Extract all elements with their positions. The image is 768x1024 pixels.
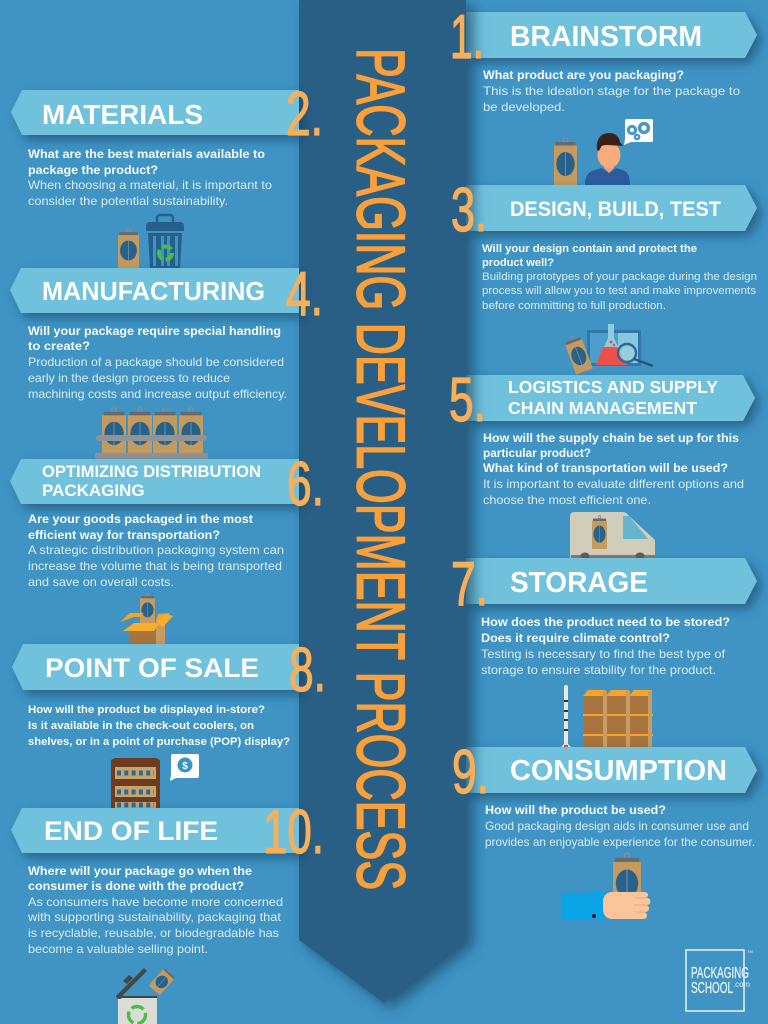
icon: can going into recycling bin bbox=[116, 966, 177, 1024]
icon: store shelf and price bubble bbox=[111, 754, 199, 808]
text block: step 5: choose the most efficient one. bbox=[483, 493, 651, 507]
text block: step 9 bbox=[485, 803, 755, 849]
text block: step 1: What product are you packaging? bbox=[483, 68, 684, 82]
panel: step 2 materials bbox=[11, 80, 323, 268]
number 4: 4. bbox=[286, 260, 323, 329]
text block: step 4: early in the design process to reduce bbox=[28, 371, 230, 385]
text block: step 9: Good packaging design aids in consumer use and bbox=[485, 819, 749, 833]
heading ribbon: brainstorm: BRAINSTORM bbox=[510, 21, 702, 53]
text block: step 1 bbox=[483, 68, 740, 114]
text block: step 5: particular product? bbox=[483, 446, 591, 460]
text block: step 3: before committing to full production. bbox=[482, 300, 666, 312]
text block: step 6: efficient way for transportation? bbox=[28, 528, 220, 542]
panel: step 5 logistics bbox=[466, 375, 755, 560]
heading ribbon: materials bbox=[11, 90, 299, 135]
icon: can in open box bbox=[120, 594, 173, 644]
text block: step 5: How will the supply chain be set up for this bbox=[483, 431, 739, 445]
icon: hand holding can bbox=[562, 853, 650, 920]
heading ribbon: point of sale bbox=[12, 644, 299, 690]
text block: step 3 bbox=[482, 243, 757, 312]
text block: step 4: Production of a package should be considered bbox=[28, 355, 284, 369]
number 10: 10. bbox=[263, 798, 324, 867]
heading ribbon: optimizing distribution packaging: OPTIMIZING DISTRIBUTION bbox=[42, 462, 261, 481]
text block: step 3: Building prototypes of your package during the design bbox=[482, 271, 757, 283]
heading ribbon: consumption: CONSUMPTION bbox=[510, 755, 727, 787]
text block: step 10 bbox=[27, 864, 283, 956]
number 2: 2. bbox=[286, 80, 323, 149]
text block: step 4 bbox=[28, 324, 287, 401]
heading ribbon: design, build, test bbox=[466, 185, 757, 231]
text block: step 3: process will allow you to test and make improvements bbox=[482, 285, 756, 297]
heading ribbon: logistics and supply chain management: LOGISTICS AND SUPPLY bbox=[508, 377, 718, 397]
panel: step 4 manufacturing bbox=[10, 260, 323, 459]
number 3: 3. bbox=[451, 176, 487, 245]
logo: packaging school: .com bbox=[733, 980, 750, 989]
text block: step 2: package the product? bbox=[28, 163, 158, 177]
text block: step 9: provides an enjoyable experience for the consumer. bbox=[485, 835, 755, 849]
text block: step 10: As consumers have become more concerned bbox=[28, 895, 283, 909]
icon: can and recycling bin bbox=[118, 215, 184, 268]
panel: step 8 point of sale bbox=[12, 636, 326, 808]
text block: step 2: When choosing a material, it is important to bbox=[28, 178, 272, 192]
icon: store shelf and price bubble: $ bbox=[182, 761, 188, 772]
heading ribbon: logistics and supply chain management: CHAIN MANAGEMENT bbox=[508, 398, 697, 418]
icon: can and thinking person bbox=[554, 119, 653, 185]
text block: step 10: with supporting sustainability, packaging that bbox=[27, 910, 282, 924]
text block: step 10: is recyclable, reusable, or biodegradable has bbox=[28, 926, 279, 940]
text block: step 7: Testing is necessary to find the best type of bbox=[481, 647, 726, 661]
panel: step 1 brainstorm bbox=[466, 12, 757, 185]
text block: step 6: A strategic distribution packaging system can bbox=[28, 543, 284, 557]
logo: packaging school: TM bbox=[747, 949, 753, 954]
number 6: 6. bbox=[287, 450, 324, 519]
text block: step 1: be developed. bbox=[483, 100, 565, 114]
text block: step 7 bbox=[481, 615, 730, 677]
text block: step 10: become a valuable selling point. bbox=[28, 942, 208, 956]
text block: step 2 bbox=[28, 147, 272, 208]
panel: step 6 distribution bbox=[10, 450, 324, 644]
central banner bbox=[299, 0, 466, 1003]
text block: step 3: Will your design contain and protect the bbox=[482, 243, 697, 255]
number 1: 1. bbox=[450, 3, 484, 72]
text block: step 8 bbox=[28, 704, 290, 748]
icon: can, flask and magnifier bbox=[563, 324, 653, 375]
text block: step 1: This is the ideation stage for the package to bbox=[483, 84, 740, 98]
text block: step 6 bbox=[28, 512, 284, 589]
text block: step 8: Is it available in the check-out coolers, on bbox=[28, 720, 254, 732]
icon: cans on conveyor bbox=[95, 408, 208, 459]
panel: step 3 design build test bbox=[466, 185, 757, 375]
heading ribbon: optimizing distribution packaging bbox=[10, 459, 299, 504]
heading ribbon: design, build, test: DESIGN, BUILD, TEST bbox=[510, 198, 721, 221]
icon: delivery van bbox=[570, 512, 655, 560]
panel: step 7 storage bbox=[466, 558, 757, 748]
text block: step 3: product well? bbox=[482, 257, 554, 269]
text block: step 6: Are your goods packaged in the most bbox=[28, 512, 253, 526]
text block: step 2: What are the best materials available to bbox=[28, 147, 265, 161]
text block: step 7: How does the product need to be stored? bbox=[481, 615, 730, 629]
text block: step 8: shelves, or in a point of purchase (POP) display? bbox=[28, 736, 290, 748]
text block: step 4: to create? bbox=[28, 339, 90, 353]
text block: step 6: increase the volume that is being transported bbox=[28, 559, 282, 573]
number 5: 5. bbox=[449, 366, 486, 435]
text block: step 7: storage to ensure stability for the product. bbox=[481, 663, 716, 677]
panel: step 10 end of life bbox=[11, 798, 324, 1024]
text block: step 5: What kind of transportation will be used? bbox=[483, 461, 728, 475]
text block: step 9: How will the product be used? bbox=[485, 803, 666, 817]
heading ribbon: materials: MATERIALS bbox=[42, 99, 203, 130]
heading ribbon: optimizing distribution packaging: PACKAGING bbox=[42, 481, 145, 500]
logo: packaging school: SCHOOL bbox=[691, 980, 733, 997]
heading ribbon: logistics and supply chain management bbox=[466, 375, 755, 421]
number 9: 9. bbox=[452, 738, 489, 807]
heading ribbon: storage bbox=[466, 558, 757, 604]
icon: thermometer and stacked boxes bbox=[560, 685, 653, 748]
heading ribbon: brainstorm bbox=[466, 12, 757, 58]
text block: step 6: and save on overall costs. bbox=[28, 575, 174, 589]
number 7: 7. bbox=[451, 550, 488, 619]
text block: step 4: machining costs and increase output efficiency. bbox=[28, 387, 287, 401]
number 8: 8. bbox=[289, 636, 326, 705]
text block: step 7: Does it require climate control? bbox=[481, 631, 670, 645]
heading ribbon: end of life bbox=[11, 808, 299, 853]
heading ribbon: manufacturing bbox=[10, 268, 299, 313]
heading ribbon: end of life: END OF LIFE bbox=[44, 816, 218, 846]
heading ribbon: point of sale: POINT OF SALE bbox=[45, 653, 259, 683]
heading ribbon: consumption bbox=[466, 747, 757, 793]
heading ribbon: manufacturing: MANUFACTURING bbox=[42, 276, 265, 306]
text block: step 2: consider the potential sustainability. bbox=[28, 194, 228, 208]
text block: step 4: Will your package require special handling bbox=[28, 324, 281, 338]
text block: step 5 bbox=[483, 431, 744, 507]
text block: step 10: Where will your package go when the bbox=[28, 864, 252, 878]
text block: step 5: It is important to evaluate different options and bbox=[483, 477, 744, 491]
panel: step 9 consumption bbox=[466, 747, 757, 920]
logo: packaging school bbox=[686, 949, 753, 1011]
text block: step 8: How will the product be displayed in-store? bbox=[28, 704, 265, 716]
text block: step 10: consumer is done with the product? bbox=[28, 879, 244, 893]
heading ribbon: storage: STORAGE bbox=[510, 567, 648, 599]
